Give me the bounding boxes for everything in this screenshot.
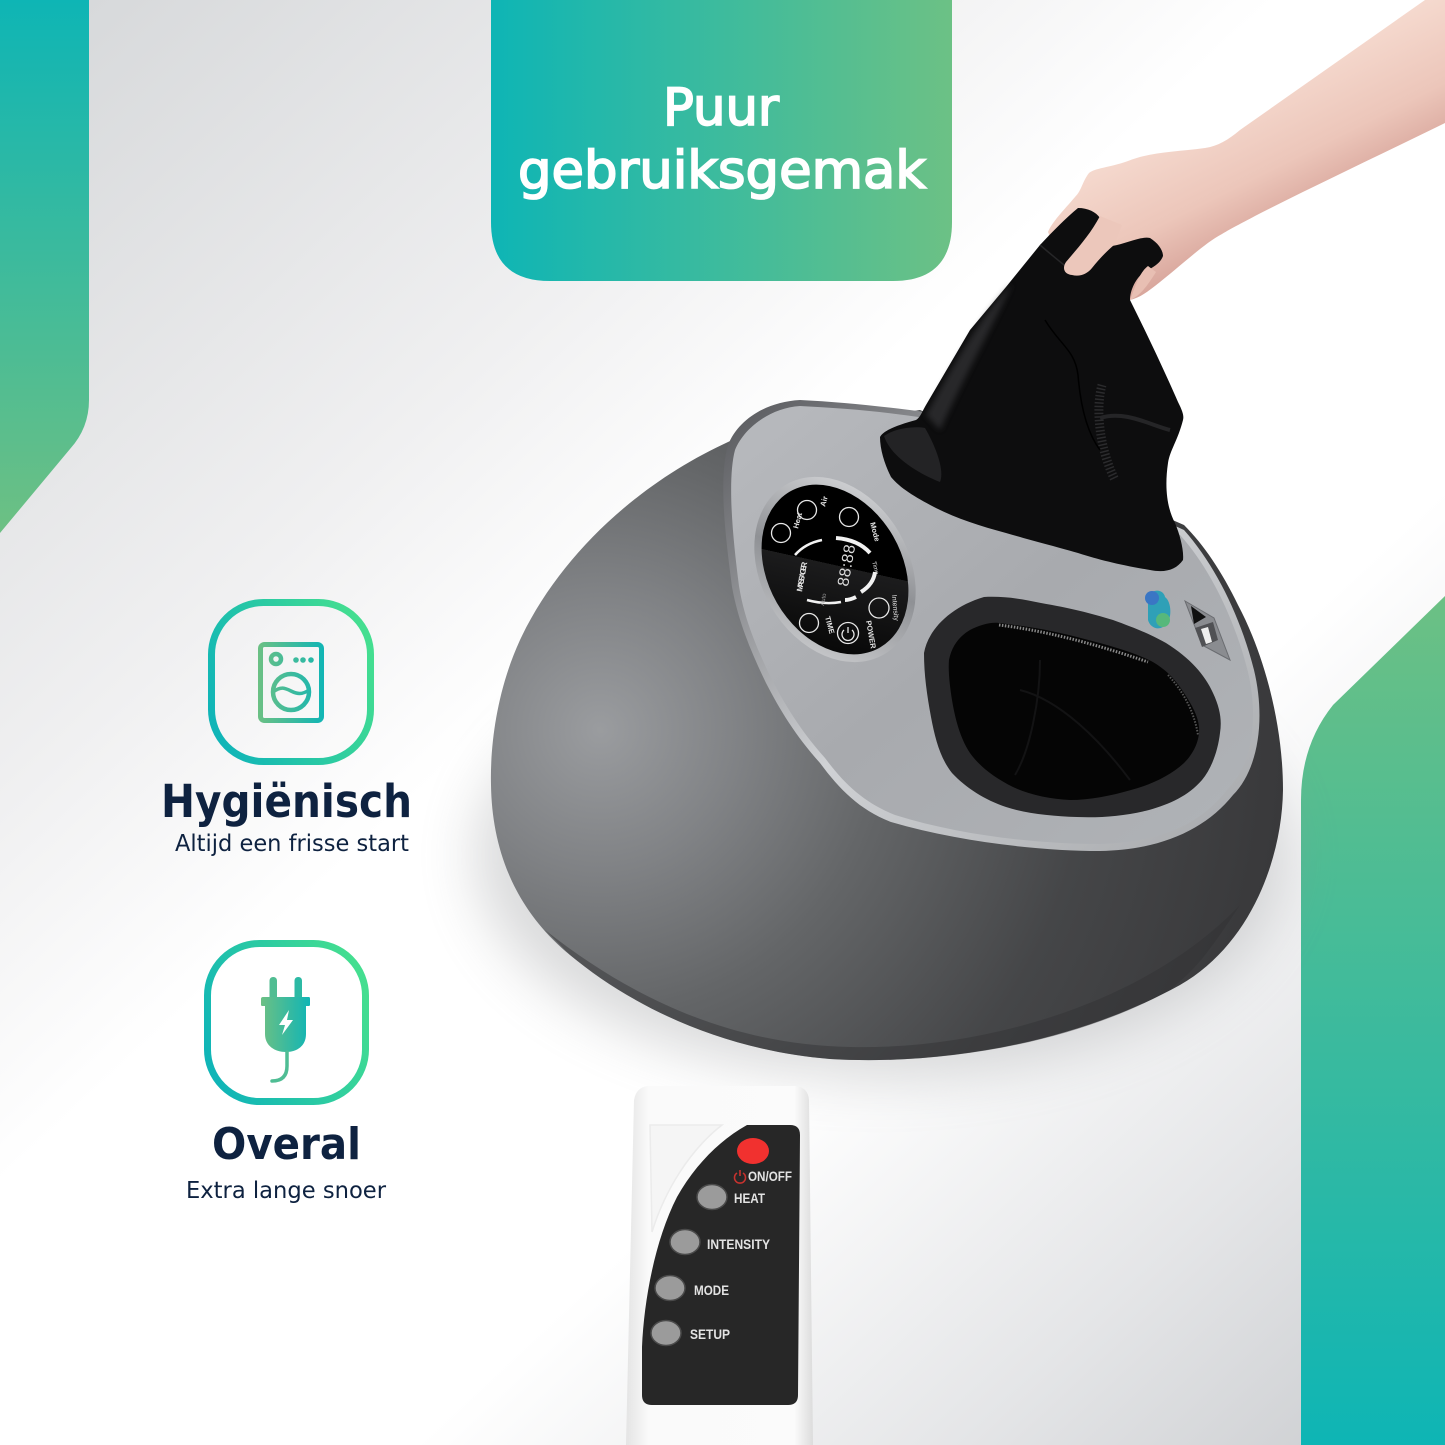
sock highlight left — [926, 284, 1012, 430]
top plate rim — [723, 400, 1259, 851]
sock brim texture — [884, 427, 941, 482]
massager shadow — [475, 633, 1285, 1077]
display labels: TIME — [823, 615, 836, 635]
foot opening stitching — [999, 625, 1148, 662]
display ring — [795, 538, 875, 603]
brand logo — [1145, 591, 1170, 628]
title panel — [491, 0, 952, 281]
massager body — [491, 410, 1283, 1060]
foot massager — [491, 208, 1283, 1060]
feature: hygienic — [161, 602, 412, 857]
thumb — [1064, 216, 1122, 276]
heading: Overal: Overal — [212, 1119, 361, 1170]
left accent strip — [0, 0, 89, 533]
display labels: Time — [870, 561, 879, 576]
display labels: MASSAGER — [795, 561, 809, 592]
display labels: Intensity — [890, 595, 899, 622]
display buttons — [772, 500, 889, 644]
top plate — [731, 406, 1253, 844]
display labels — [791, 495, 899, 650]
icon: power — [734, 1170, 746, 1183]
display labels: Heat — [791, 511, 804, 530]
remote labels: INTENSITY — [707, 1236, 771, 1252]
sock seam — [1045, 320, 1100, 450]
remote labels: ON/OFF — [748, 1168, 792, 1184]
inner fabric folds — [1015, 660, 1130, 780]
remote groove — [650, 1125, 722, 1232]
right accent strip — [1301, 596, 1445, 1445]
remote control — [626, 1086, 813, 1445]
black liner sock — [880, 208, 1183, 571]
button: mode — [655, 1276, 685, 1300]
title — [518, 78, 926, 201]
display labels: Auto — [820, 592, 828, 606]
icon: plug — [208, 944, 366, 1102]
text: Extra lange snoer: Extra lange snoer — [186, 1178, 387, 1204]
remote labels: SETUP — [690, 1326, 730, 1342]
remote labels: HEAT — [734, 1190, 765, 1206]
display labels: POWER — [864, 620, 878, 650]
power button — [737, 1138, 769, 1164]
finger sliver — [1130, 266, 1156, 300]
text: Altijd een frisse start: Altijd een frisse start — [175, 831, 409, 857]
sock ribbed fold right — [1099, 385, 1115, 480]
remote labels — [690, 1168, 792, 1342]
heading: Hygiënisch: Hygiënisch — [161, 775, 412, 828]
display labels: Mode — [868, 521, 882, 542]
sock hem band — [1040, 245, 1075, 274]
right foot opening — [924, 597, 1221, 817]
control display — [732, 458, 938, 681]
remote labels: MODE — [694, 1282, 729, 1298]
remote panel — [642, 1125, 800, 1405]
remote body — [626, 1086, 813, 1445]
button: heat — [697, 1184, 727, 1210]
feature: anywhere — [186, 944, 387, 1204]
display labels: Air — [818, 495, 830, 508]
icon: washing machine — [212, 602, 370, 762]
title: Puur — [663, 78, 780, 138]
arm and hand — [1048, 0, 1445, 300]
display digits: 88:88 — [835, 543, 859, 588]
display bezel — [722, 448, 948, 691]
body lower shading — [545, 905, 1240, 1060]
button: setup — [651, 1320, 681, 1346]
title: gebruiksgemak — [518, 141, 926, 201]
button: intensity — [670, 1230, 700, 1254]
usb port — [1185, 601, 1230, 660]
